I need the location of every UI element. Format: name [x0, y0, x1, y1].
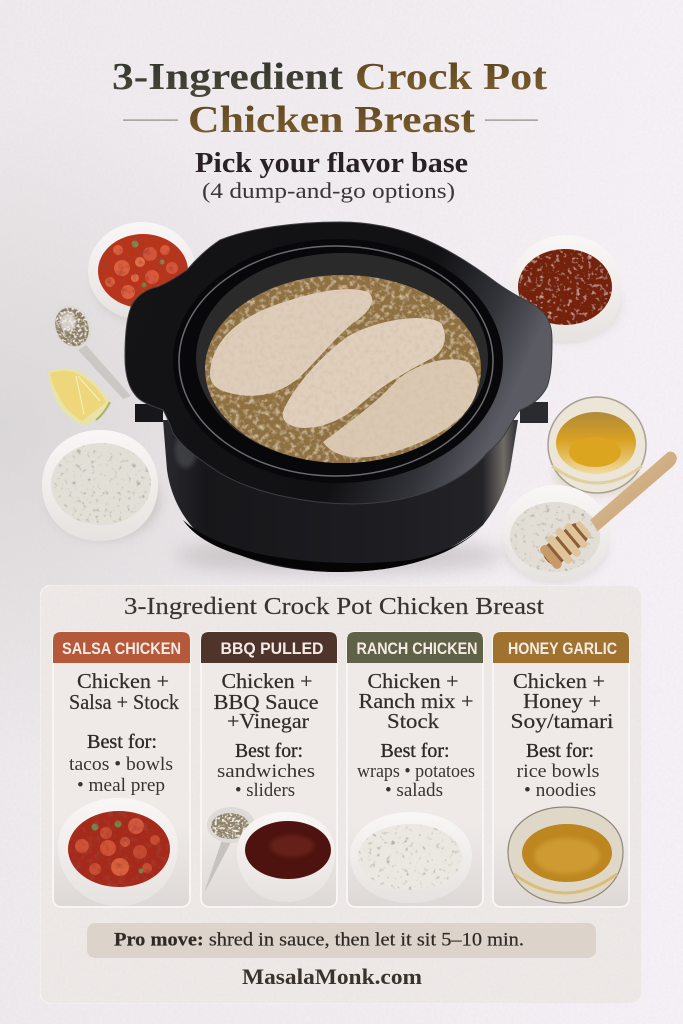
honey glass bowl	[508, 807, 623, 903]
bowl: seasoning, bottom right	[502, 485, 610, 583]
side tabs	[135, 404, 163, 422]
card: honey garlic	[493, 632, 629, 907]
crock pot	[125, 222, 552, 574]
subtitle	[195, 148, 468, 203]
card: bbq pulled: BBQ PULLED	[220, 640, 324, 658]
card: salsa chicken: Salsa + Stock	[69, 690, 179, 714]
card: salsa chicken: • meal prep	[77, 775, 165, 796]
card: ranch chicken: Ranch mix +	[358, 689, 474, 713]
recipe panel	[40, 585, 642, 1004]
title: Crock Pot	[355, 56, 547, 98]
subtitle: Pick your flavor base	[195, 148, 468, 179]
card: ranch chicken: • salads	[385, 780, 443, 801]
card: bbq pulled: Best for:	[235, 741, 303, 762]
broth	[205, 275, 481, 463]
website footer: MasalaMonk.com	[242, 964, 422, 989]
panel heading: 3-Ingredient Crock Pot Chicken Breast	[124, 594, 544, 620]
card: honey garlic: • noodies	[524, 780, 596, 801]
card: honey garlic: HONEY GARLIC	[508, 640, 617, 658]
pro tip bar	[87, 923, 596, 958]
ranch bowl	[350, 812, 472, 903]
card: honey garlic: Chicken +	[513, 669, 605, 693]
chicken breasts	[210, 289, 478, 457]
card: honey garlic: Honey +	[523, 689, 601, 713]
card: bbq pulled: Chicken +	[222, 669, 312, 693]
title	[112, 56, 547, 141]
card: ranch chicken: wraps • potatoes	[357, 761, 475, 782]
card: ranch chicken: Best for:	[380, 741, 450, 762]
card: bbq pulled: +Vinegar	[227, 709, 309, 733]
bowl: bbq sauce, top right	[510, 235, 622, 344]
card: honey garlic: Best for:	[526, 741, 594, 762]
card: ranch chicken: RANCH CHICKEN	[356, 640, 478, 658]
card: ranch chicken	[347, 632, 483, 907]
card: salsa chicken: SALSA CHICKEN	[62, 640, 181, 658]
card: salsa chicken: Chicken +	[77, 669, 169, 693]
measuring spoon with spices	[45, 298, 131, 399]
card: ranch chicken: Chicken +	[368, 669, 458, 693]
card: bbq pulled	[201, 632, 337, 907]
title: 3-Ingredient	[112, 56, 343, 98]
card: salsa chicken	[53, 632, 190, 907]
card: salsa chicken: Best for:	[87, 732, 157, 753]
card: honey garlic: rice bowls	[516, 761, 600, 782]
lemon wedge	[48, 368, 110, 426]
opening ring	[173, 239, 503, 483]
bowl: honey in glass	[548, 397, 646, 495]
card: salsa chicken: tacos • bowls	[69, 754, 173, 775]
subtitle: (4 dump-and-go options)	[202, 178, 455, 203]
card: bbq pulled: sandwiches	[217, 761, 315, 782]
card: ranch chicken: Stock	[387, 709, 440, 733]
bowl: ranch, left	[42, 430, 160, 541]
pro tip bar: Pro move: shred in sauce, then let it sit 5–10 min.	[114, 930, 524, 950]
honey dipper	[536, 452, 677, 574]
bowl: salsa, top left	[88, 222, 198, 322]
card: bbq pulled: BBQ Sauce	[214, 690, 318, 714]
spoon and bbq bowl	[204, 807, 335, 902]
card: bbq pulled: • sliders	[235, 780, 295, 801]
pot body	[163, 420, 518, 572]
pot rim and handles	[125, 222, 552, 504]
pot shadow	[175, 538, 505, 574]
title: Chicken Breast	[188, 99, 475, 141]
card: honey garlic: Soy/tamari	[510, 709, 614, 733]
salsa bowl	[58, 798, 178, 906]
